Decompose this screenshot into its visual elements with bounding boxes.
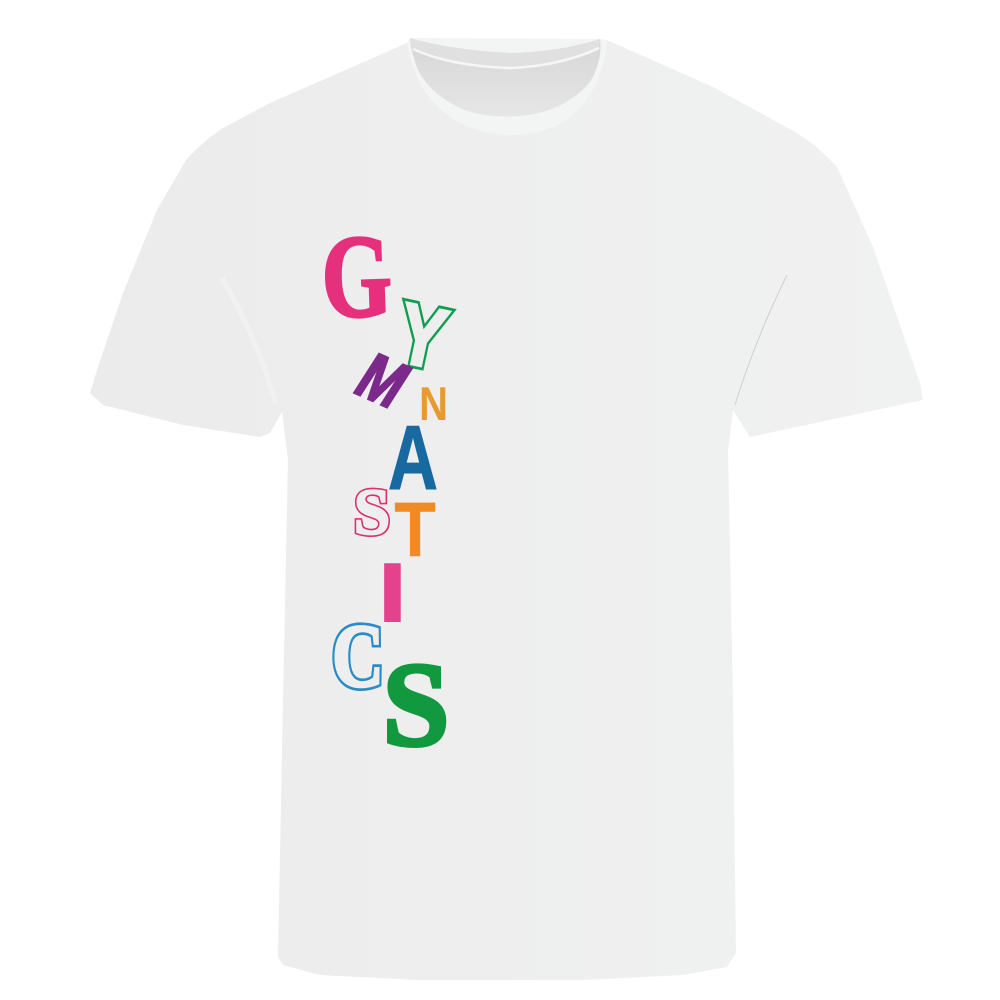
letter T: T <box>394 487 436 573</box>
letter C outlined: C <box>332 605 384 706</box>
letter S outlined: S <box>354 476 390 549</box>
front collar rib <box>407 38 607 135</box>
letter C outlined: C <box>332 605 384 706</box>
letter Y: Y <box>389 284 455 388</box>
letter G: G <box>319 210 394 343</box>
letter N: N <box>419 379 448 431</box>
letter Y: Y <box>389 284 455 388</box>
neck opening <box>410 38 601 117</box>
word: GYMNASTICS <box>319 210 455 771</box>
letter S outlined: S <box>354 476 390 549</box>
shirt body and sleeves <box>90 40 923 980</box>
letter M: M <box>348 337 418 424</box>
right sleeve seam <box>735 275 787 405</box>
t-shirt <box>90 38 923 980</box>
letter A: A <box>388 408 438 509</box>
collar seam <box>413 48 599 68</box>
letter I: I <box>377 546 408 641</box>
back collar <box>410 38 600 70</box>
left sleeve seam <box>222 278 276 404</box>
letter S green: S <box>383 638 449 771</box>
